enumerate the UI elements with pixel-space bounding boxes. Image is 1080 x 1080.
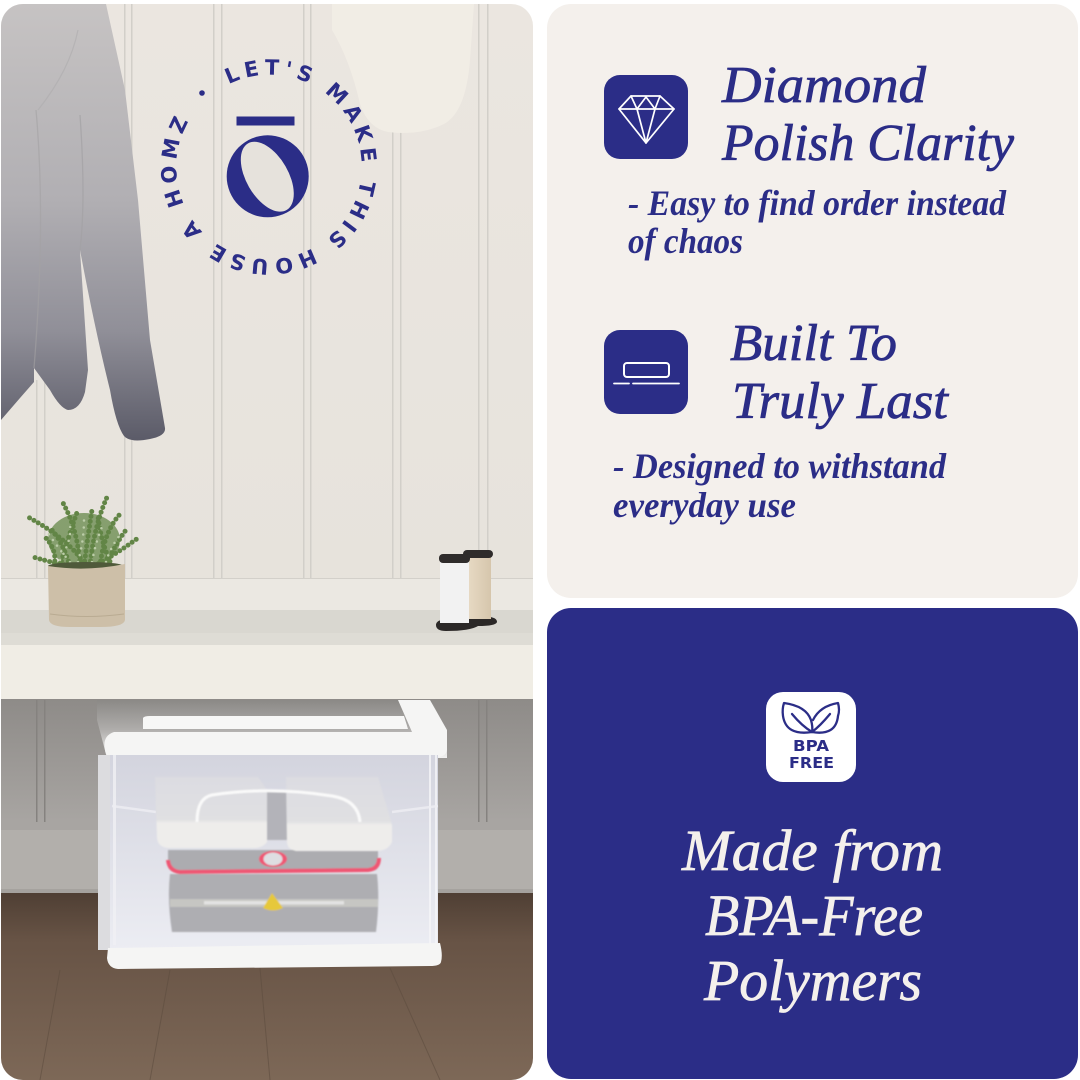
lower wall	[1, 699, 533, 895]
panel: product photo	[1, 4, 533, 1080]
text: easy to find order: - Easy to find order instead	[628, 183, 1007, 223]
panel: features	[547, 4, 1078, 598]
contents: case in drawer	[155, 777, 392, 932]
heading: made from BPA-free polymers: BPA-Free	[705, 883, 923, 948]
icon: shelf board	[604, 330, 688, 414]
heading: Built To Truly Last: Built To	[730, 315, 897, 372]
heading: Built To Truly Last: Truly Last	[732, 373, 950, 430]
text: designed to withstand	[613, 446, 947, 525]
hanging sweater	[1, 4, 165, 440]
spools	[436, 550, 497, 631]
heading: Diamond Polish Clarity: Polish Clarity	[721, 115, 1015, 172]
text: easy to find order: of chaos	[628, 221, 743, 261]
text: easy to find order	[628, 183, 1007, 261]
heading: made from BPA-free polymers	[681, 818, 943, 1013]
cap on hook	[392, 100, 402, 133]
circular slogan badge	[160, 59, 377, 275]
icon: diamond	[604, 75, 688, 159]
text: designed to withstand: everyday use	[613, 485, 796, 525]
text: designed to withstand: - Designed to withstand	[613, 446, 947, 486]
panel: BPA free	[547, 608, 1078, 1079]
icon: BPA free leaves: FREE	[789, 754, 834, 772]
heading: made from BPA-free polymers: Made from	[681, 818, 943, 883]
plant in pot	[28, 495, 138, 627]
storage drawer	[97, 700, 447, 969]
wall panel grooves	[36, 4, 488, 580]
shelf	[1, 578, 533, 699]
heading: Diamond Polish Clarity: Diamond	[721, 57, 927, 114]
icon: BPA free leaves: BPA	[793, 737, 829, 755]
icon: BPA free leaves	[766, 692, 856, 782]
slogan ring text: LET'S MAKE THIS HOUSE A HOMZ	[160, 59, 377, 275]
heading: Built To Truly Last	[730, 315, 950, 430]
floor	[1, 893, 533, 1080]
heading: made from BPA-free polymers: Polymers	[703, 948, 922, 1013]
ring dot	[199, 90, 205, 96]
heading: Diamond Polish Clarity	[721, 57, 1015, 172]
logo mark	[227, 116, 309, 221]
